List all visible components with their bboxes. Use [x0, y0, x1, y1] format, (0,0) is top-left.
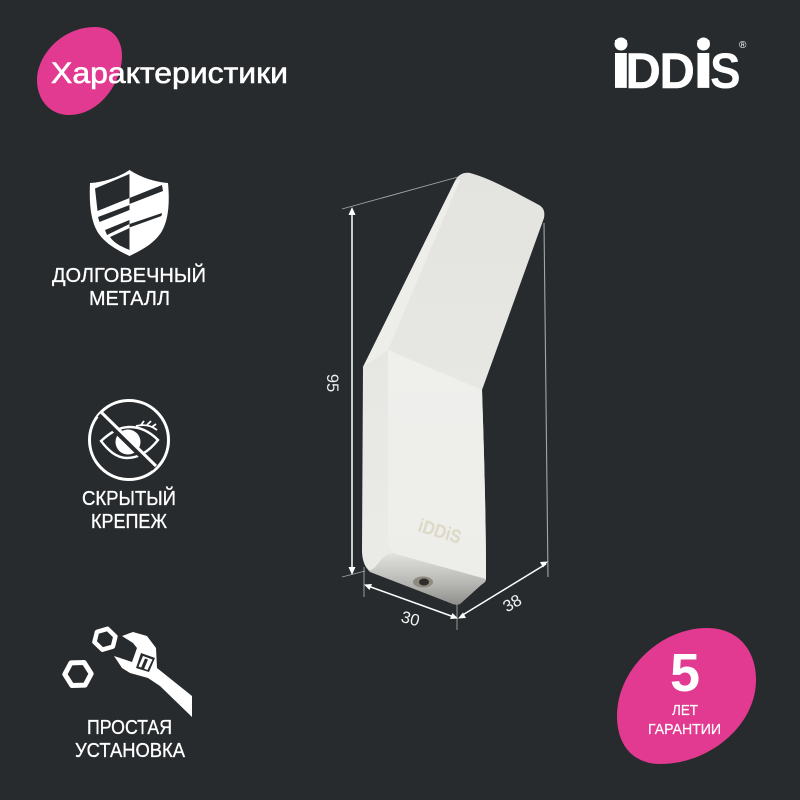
- brand logo: i: [609, 29, 633, 103]
- label: МЕТАЛЛ: [89, 288, 170, 310]
- label: СКРЫТЫЙ: [82, 486, 176, 510]
- label: [52, 263, 206, 310]
- icon: nut small: [93, 627, 117, 652]
- label: КРЕПЕЖ: [91, 511, 167, 533]
- label: УСТАНОВКА: [75, 740, 186, 762]
- brand logo: D: [660, 44, 695, 99]
- left bevel highlight on upper arm: [363, 180, 460, 367]
- screw: [413, 576, 433, 588]
- front face: [388, 350, 486, 580]
- brand logo: ®: [739, 40, 747, 51]
- hook body: [362, 173, 544, 605]
- brand logo: [609, 29, 747, 103]
- pink blob: [37, 27, 122, 115]
- brand logo: S: [710, 44, 741, 99]
- warranty badge: ГАРАНТИИ: [648, 722, 721, 738]
- brand logo: D: [626, 44, 661, 99]
- heading text: Характеристики: [51, 57, 288, 90]
- engraved logo: iDDiS: [416, 516, 464, 549]
- dimension 95: 95: [323, 374, 341, 392]
- warranty badge: [617, 628, 756, 764]
- icon: wrench: [114, 632, 192, 717]
- label: ДОЛГОВЕЧНЫЙ: [52, 263, 206, 287]
- feature: hidden fastening: [82, 400, 176, 533]
- product with dimensions: [323, 173, 548, 630]
- label: ПРОСТАЯ: [87, 717, 172, 739]
- brand logo: i: [692, 29, 715, 103]
- dimension 38: 38: [500, 591, 525, 616]
- icon: crossed-out eye: [90, 400, 168, 480]
- underside: [366, 553, 486, 605]
- icon: shield: [90, 170, 169, 256]
- label: [82, 486, 176, 533]
- feature: simple installation: [62, 627, 192, 762]
- label: [75, 717, 186, 762]
- icon: nut large: [62, 657, 94, 691]
- feature: durable metal: [52, 170, 206, 310]
- label: ЛЕТ: [672, 703, 698, 719]
- dimension 30: 30: [399, 608, 421, 630]
- number: 5: [670, 643, 700, 703]
- dimension lines: [342, 177, 548, 630]
- pink blob: [617, 628, 756, 764]
- heading: characteristics: [37, 27, 288, 115]
